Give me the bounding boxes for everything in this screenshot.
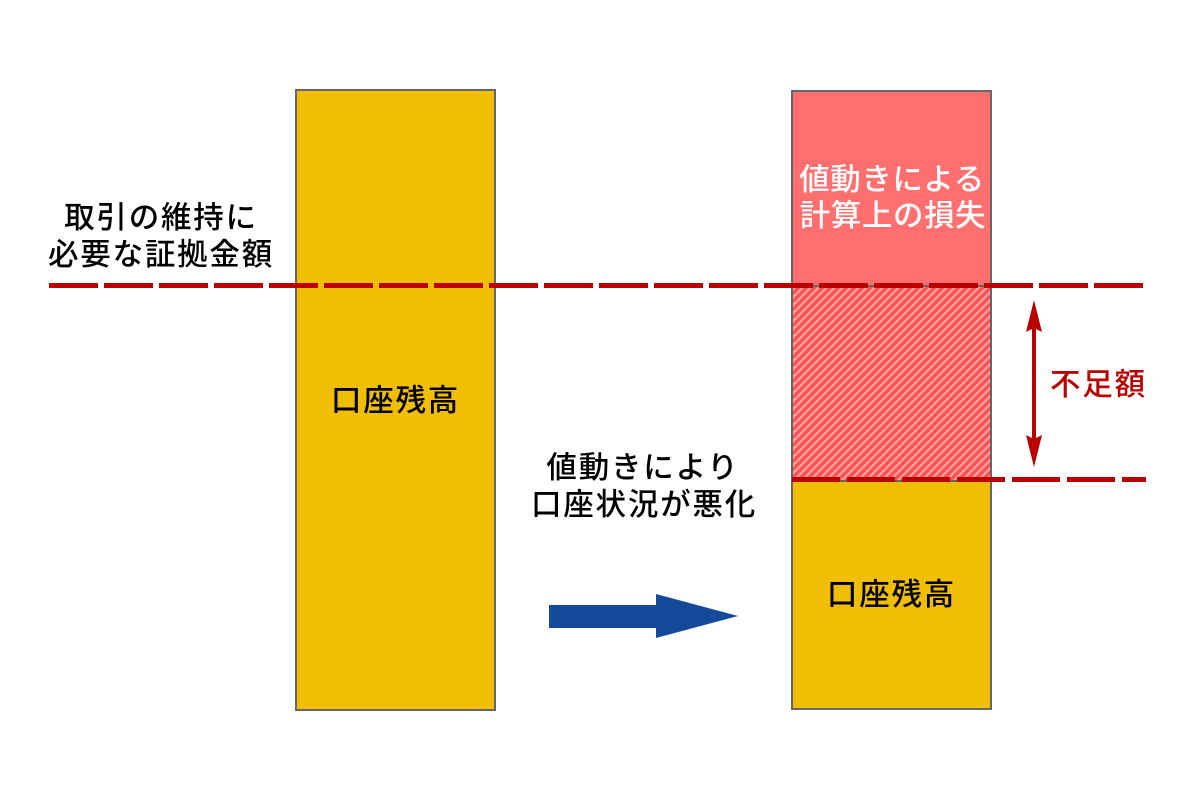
remaining balance segment [792, 481, 991, 709]
loss label: 計算上の損失 [800, 199, 986, 233]
required margin label: 必要な証拠金額 [48, 238, 274, 272]
right stacked bar [792, 91, 991, 709]
required margin dashed line [49, 283, 1143, 288]
left account balance bar [296, 90, 495, 710]
shortfall bottom dashed line [792, 477, 1146, 482]
left bar label: 口座残高 [331, 384, 460, 418]
right bar balance label: 口座残高 [827, 578, 956, 612]
transition caption: 値動きにより [546, 451, 740, 485]
shortfall label: 不足額 [1050, 368, 1147, 402]
transition caption: 口座状況が悪化 [531, 488, 757, 522]
loss label: 値動きによる [799, 163, 985, 197]
required margin label: 取引の維持に [64, 201, 258, 235]
loss segment [792, 91, 991, 286]
shortfall hatched segment [792, 286, 991, 481]
shortfall double arrow [1026, 300, 1042, 467]
blue transition arrow [549, 594, 738, 638]
